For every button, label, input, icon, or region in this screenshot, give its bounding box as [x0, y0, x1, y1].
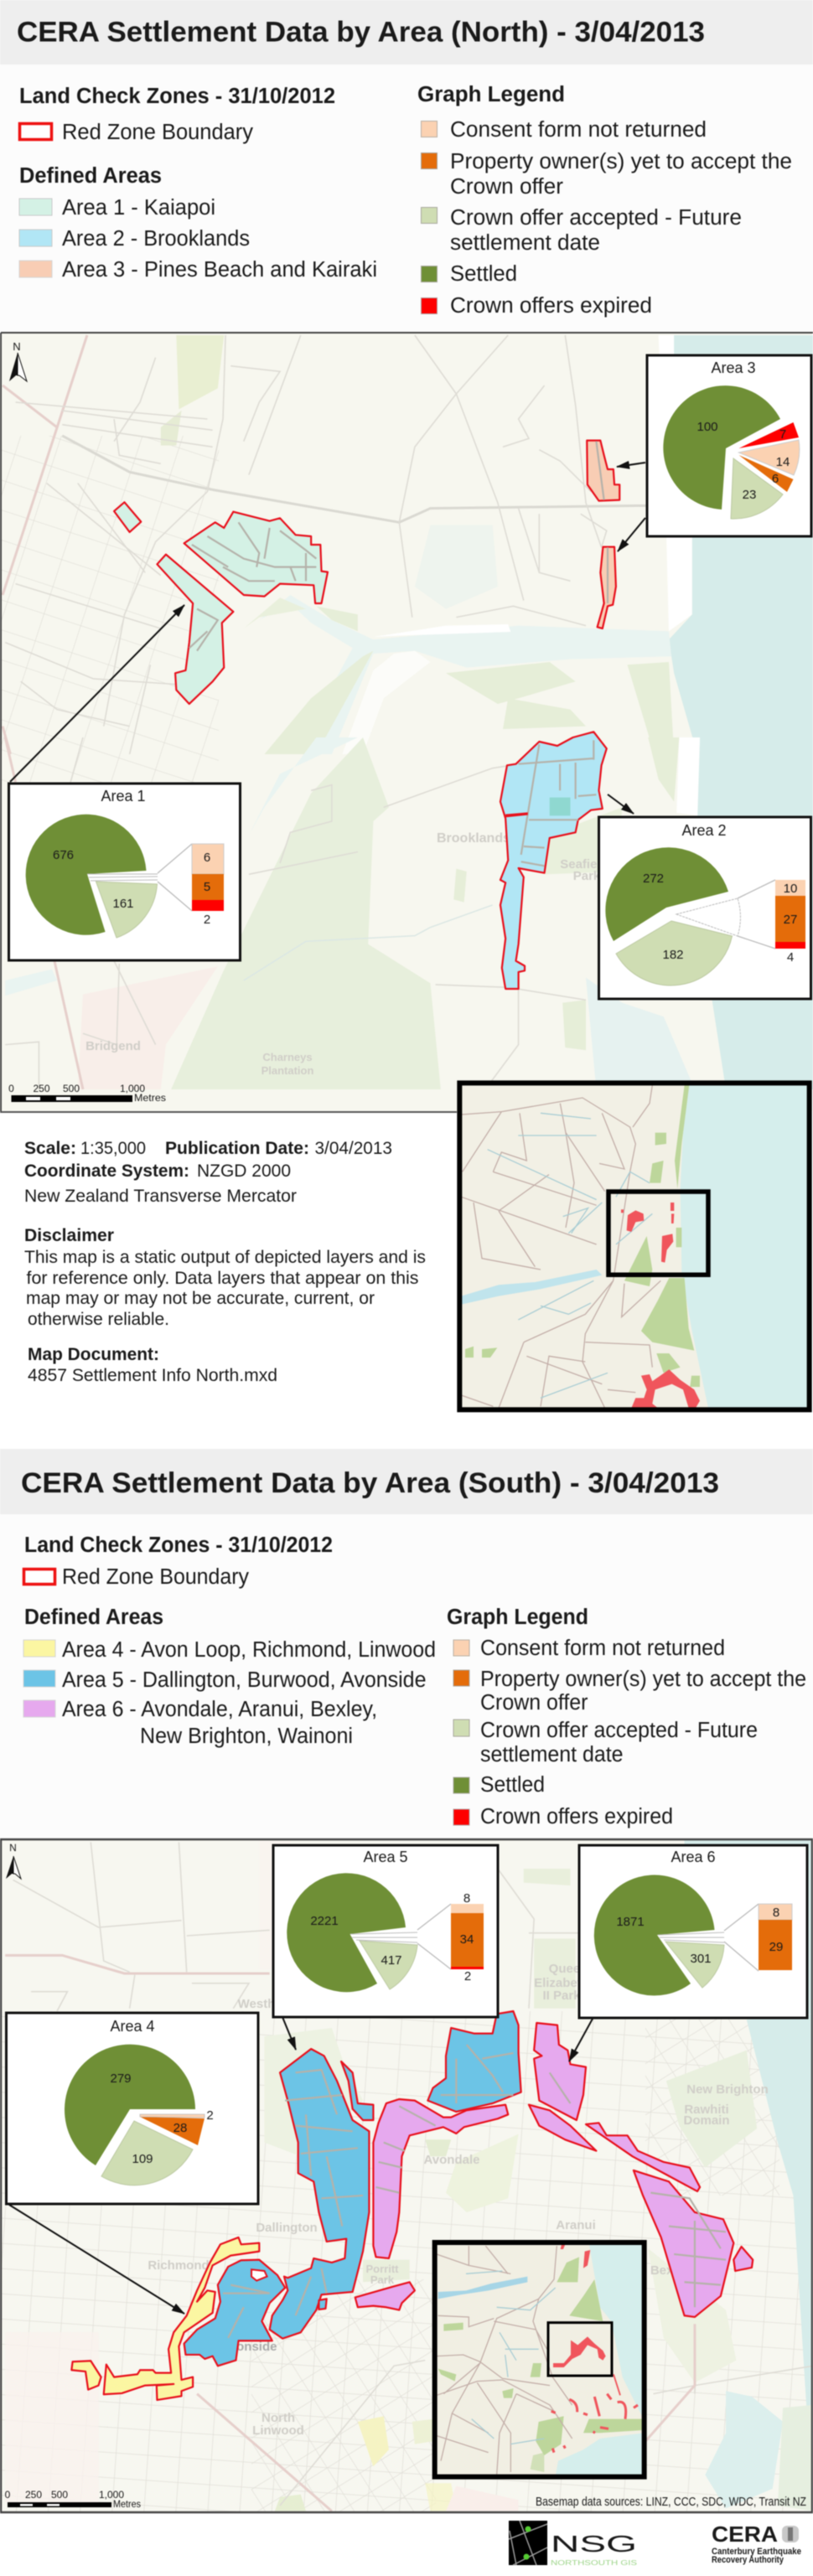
south map place labels: Porritt	[365, 2263, 399, 2275]
map: south defined areas	[71, 2011, 753, 2400]
chart: area 3 callout: 23	[743, 488, 756, 502]
panel: north map legend left: Land Check Zones - 31/10/2012	[19, 85, 335, 108]
south map place labels: Avondale	[424, 2153, 479, 2167]
panel: north graph legend: Consent form not returned	[450, 118, 707, 142]
south map place labels: Park	[370, 2273, 395, 2286]
scale bar north map: 250	[33, 1083, 50, 1094]
panel: map metadata and disclaimer: Map Document:	[28, 1345, 159, 1364]
map place labels: Brooklands	[437, 831, 510, 846]
area 1 Kaiapoi polygons	[114, 502, 328, 704]
chart: area 5 callout: 2221	[310, 1914, 339, 1928]
panel: north graph legend	[417, 83, 792, 318]
panel: north graph legend: Crown offer	[450, 175, 564, 199]
arrow: area 6	[569, 2019, 593, 2061]
panel: map metadata and disclaimer: Disclaimer	[24, 1226, 114, 1245]
panel: south graph legend: Property owner(s) yet to accept the	[480, 1668, 806, 1691]
chart: area 4 callout: 279	[110, 2072, 132, 2086]
chart: area 1 callout: 676	[53, 848, 74, 862]
scale bar north map: 500	[63, 1083, 80, 1094]
area 4 Avon Loop polygons	[71, 2237, 259, 2400]
panel: north map legend left	[0, 65, 813, 333]
panel: map metadata and disclaimer: New Zealand Transverse Mercator	[24, 1187, 297, 1206]
map place labels: Park	[573, 869, 601, 883]
chart: area 1 callout: 161	[112, 897, 134, 911]
chart: area 6 callout: 29	[769, 1940, 783, 1954]
arrow: area 3 to lower zone	[618, 518, 645, 551]
logo: CERA: CERA	[712, 2522, 778, 2547]
panel: north graph legend: Property owner(s) yet to accept the	[450, 150, 792, 173]
south map place labels: Rawhiti	[684, 2103, 729, 2117]
panel: north graph legend: Graph Legend	[417, 83, 565, 106]
chart: area 5 callout: 34	[460, 1932, 474, 1947]
panel: north map legend left: Defined Areas	[19, 164, 162, 188]
panel: south graph legend: Graph Legend	[447, 1606, 588, 1629]
panel: south graph legend: settlement date	[480, 1743, 624, 1766]
south map place labels: Avonside	[221, 2340, 277, 2354]
panel: south map legend left: Red Zone Boundary	[62, 1565, 249, 1589]
panel: north map legend left: Area 3 - Pines Beach and Kairaki	[62, 258, 377, 282]
panel: map metadata and disclaimer: Coordinate System:	[24, 1161, 189, 1181]
map place labels	[85, 831, 608, 1077]
chart: area 1 callout: 2	[204, 913, 210, 927]
chart: area 2 callout: 182	[662, 948, 684, 962]
panel: map metadata and disclaimer: NZGD 2000	[197, 1161, 291, 1181]
arrow: area 5	[282, 2017, 296, 2050]
chart: area 5 callout: 8	[463, 1891, 470, 1906]
area 5 Dallington polygons	[184, 2011, 521, 2366]
panel: map metadata and disclaimer: Scale:	[24, 1139, 76, 1158]
panel: map metadata and disclaimer: 3/04/2013	[315, 1139, 392, 1158]
logo: NSG	[509, 2521, 637, 2567]
panel: map metadata and disclaimer: 4857 Settlement Info North.mxd	[28, 1366, 277, 1385]
panel: north graph legend: settlement date	[450, 231, 600, 255]
chart: area 6 callout: 1871	[616, 1915, 645, 1929]
white gap and south header band with title: CERA Settlement Data by Area (South) - 3/04/2013	[21, 1467, 719, 1499]
panel: south map legend left: Area 6 - Avondale, Aranui, Bexley,	[62, 1698, 377, 1721]
icon: north arrow south map: N	[9, 1842, 17, 1854]
map place labels: Seafield	[560, 857, 608, 872]
chart: area 3 callout: 100	[696, 420, 718, 434]
south map place labels: Linwood	[252, 2423, 304, 2438]
chart: area 4 callout: 2	[206, 2108, 214, 2123]
arrow: area 1	[10, 605, 184, 782]
arrow: area 2	[608, 794, 634, 814]
scale bar south map: 0	[5, 2489, 11, 2501]
inset: north locator map	[459, 1083, 810, 1410]
map place labels: Charneys	[262, 1051, 313, 1063]
chart: area 4 callout: 28	[173, 2121, 187, 2135]
chart: area 6 callout: 301	[690, 1952, 712, 1966]
panel: south graph legend: Crown offer	[480, 1691, 588, 1715]
panel: north map legend left: Area 2 - Brooklands	[62, 227, 250, 251]
panel: north map base	[1, 334, 813, 1111]
north header band with title: CERA Settlement Data by Area (North) - 3/04/2013	[17, 17, 705, 49]
chart: area 2 callout: 10	[784, 882, 797, 896]
icon: north arrow north map: N	[13, 340, 21, 353]
chart: area 6 callout: 8	[773, 1906, 779, 1920]
map: north defined areas	[114, 441, 619, 989]
panel: map metadata and disclaimer: 1:35,000	[80, 1139, 146, 1158]
panel: south graph legend: Crown offer accepted - Future	[480, 1719, 758, 1742]
panel: south map legend left: Land Check Zones - 31/10/2012	[24, 1534, 333, 1557]
chart: area 5 callout: 2	[464, 1969, 471, 1984]
panel: south graph legend: Crown offers expired	[480, 1805, 673, 1829]
chart: area 5 callout: Area 5	[363, 1849, 408, 1865]
icon: north arrow south map	[6, 1842, 21, 1879]
south map place labels: Queen	[549, 1962, 588, 1976]
south map place labels: North	[262, 2411, 295, 2425]
scale bar south map: 250	[25, 2489, 42, 2501]
south map place labels: Aranui	[556, 2218, 596, 2232]
arrow: area 4	[9, 2205, 184, 2314]
logo: NSG: NSG	[551, 2531, 637, 2557]
chart: area 5 callout	[273, 1845, 498, 2017]
chart: area 2 callout: 4	[787, 950, 794, 965]
south map place labels: Elizabeth	[534, 1976, 589, 1990]
panel: map metadata and disclaimer: Publication Date:	[165, 1139, 309, 1158]
panel: map metadata and disclaimer: otherwise reliable.	[28, 1310, 169, 1329]
south map place labels	[148, 1962, 769, 2438]
chart: area 4 callout	[7, 2013, 258, 2204]
chart: area 1 callout	[8, 784, 240, 960]
chart: area 6 callout	[579, 1845, 807, 2018]
panel: south graph legend	[447, 1606, 806, 1829]
south map place labels: Richmond	[148, 2258, 210, 2273]
panel: south map legend left: New Brighton, Wainoni	[140, 1725, 353, 1748]
scale bar south map	[5, 2489, 141, 2510]
scale bar south map: Metres	[113, 2498, 141, 2510]
panel: south graph legend: Consent form not returned	[480, 1637, 725, 1660]
chart: area 3 callout	[647, 355, 811, 536]
panel: north graph legend: Crown offer accepted - Future	[450, 206, 742, 230]
north header band with title	[0, 0, 813, 65]
scale bar north map: Metres	[134, 1092, 166, 1104]
white gap and south header band with title	[0, 1449, 813, 1514]
chart: area 2 callout: Area 2	[681, 822, 727, 839]
south map place labels: II Park	[542, 1989, 581, 2003]
south map place labels: New Brighton	[686, 2082, 769, 2097]
logo: CERA: Canterbury Earthquake	[712, 2547, 801, 2557]
south map place labels: Bexley	[650, 2263, 691, 2278]
panel: south map legend left: Area 5 - Dallington, Burwood, Avonside	[62, 1668, 426, 1692]
chart: area 2 callout	[598, 817, 811, 999]
panel: map metadata and disclaimer: map may or may not be accurate, current, or	[26, 1289, 375, 1308]
panel: map metadata and disclaimer: This map is a static output of depicted layers and is	[24, 1248, 426, 1267]
map place labels: Plantation	[262, 1064, 313, 1077]
logo: CERA	[712, 2522, 801, 2565]
chart: area 6 callout: Area 6	[671, 1849, 716, 1865]
panel: map metadata and disclaimer: for reference only. Data layers that appear on this	[27, 1269, 419, 1288]
chart: area 1 callout: Area 1	[101, 788, 146, 804]
chart: area 3 callout: Area 3	[711, 360, 756, 376]
logo: NSG: NORTHSOUTH GIS	[551, 2559, 637, 2567]
panel: south map legend left: Area 4 - Avon Loop, Richmond, Linwood	[62, 1638, 436, 1662]
chart: area 2 callout: 272	[643, 872, 664, 886]
panel: south map legend left	[0, 1514, 813, 1839]
panel: south graph legend: Settled	[480, 1773, 545, 1797]
chart: area 1 callout: 5	[204, 880, 210, 894]
panel: south map base	[1, 1839, 813, 2512]
chart: area 2 callout: 27	[784, 913, 797, 927]
chart: area 1 callout: 6	[204, 851, 210, 865]
panel: map metadata and disclaimer	[0, 1111, 457, 1425]
chart: area 3 callout: 14	[776, 455, 790, 469]
inset: south locator map	[435, 2242, 645, 2477]
logo: CERA: Recovery Authority	[712, 2555, 785, 2565]
chart: area 4 callout: 109	[132, 2152, 153, 2166]
scale bar south map: 1,000	[99, 2489, 124, 2501]
map place labels: Bridgend	[85, 1039, 141, 1053]
panel: south map legend left: Defined Areas	[24, 1606, 163, 1629]
south map place labels: Domain	[683, 2113, 730, 2128]
panel: north graph legend: Crown offers expired	[450, 294, 652, 318]
area 6 Avondale polygons	[355, 2023, 753, 2317]
chart: area 3 callout: 7	[779, 427, 786, 442]
south map place labels: Westh	[238, 1997, 275, 2011]
panel: north map legend left: Area 1 - Kaiapoi	[62, 196, 215, 220]
area 3 Pines Beach polygons	[587, 441, 619, 628]
scale bar north map: 0	[8, 1083, 14, 1094]
icon: north arrow north map	[9, 340, 27, 381]
arrow: area 3 to upper zone	[617, 463, 645, 467]
scale bar north map: 1,000	[120, 1083, 145, 1094]
area 2 Brooklands polygon	[500, 732, 607, 989]
south map place labels: Dallington	[256, 2221, 318, 2235]
chart: area 3 callout: 6	[772, 472, 779, 486]
scale bar south map: 500	[51, 2489, 68, 2501]
panel: north map legend left: Red Zone Boundary	[62, 121, 253, 144]
panel: north graph legend: Settled	[450, 262, 517, 286]
chart: area 5 callout: 417	[381, 1953, 402, 1968]
scale bar north map	[8, 1083, 166, 1104]
chart: area 4 callout: Area 4	[110, 2018, 155, 2035]
